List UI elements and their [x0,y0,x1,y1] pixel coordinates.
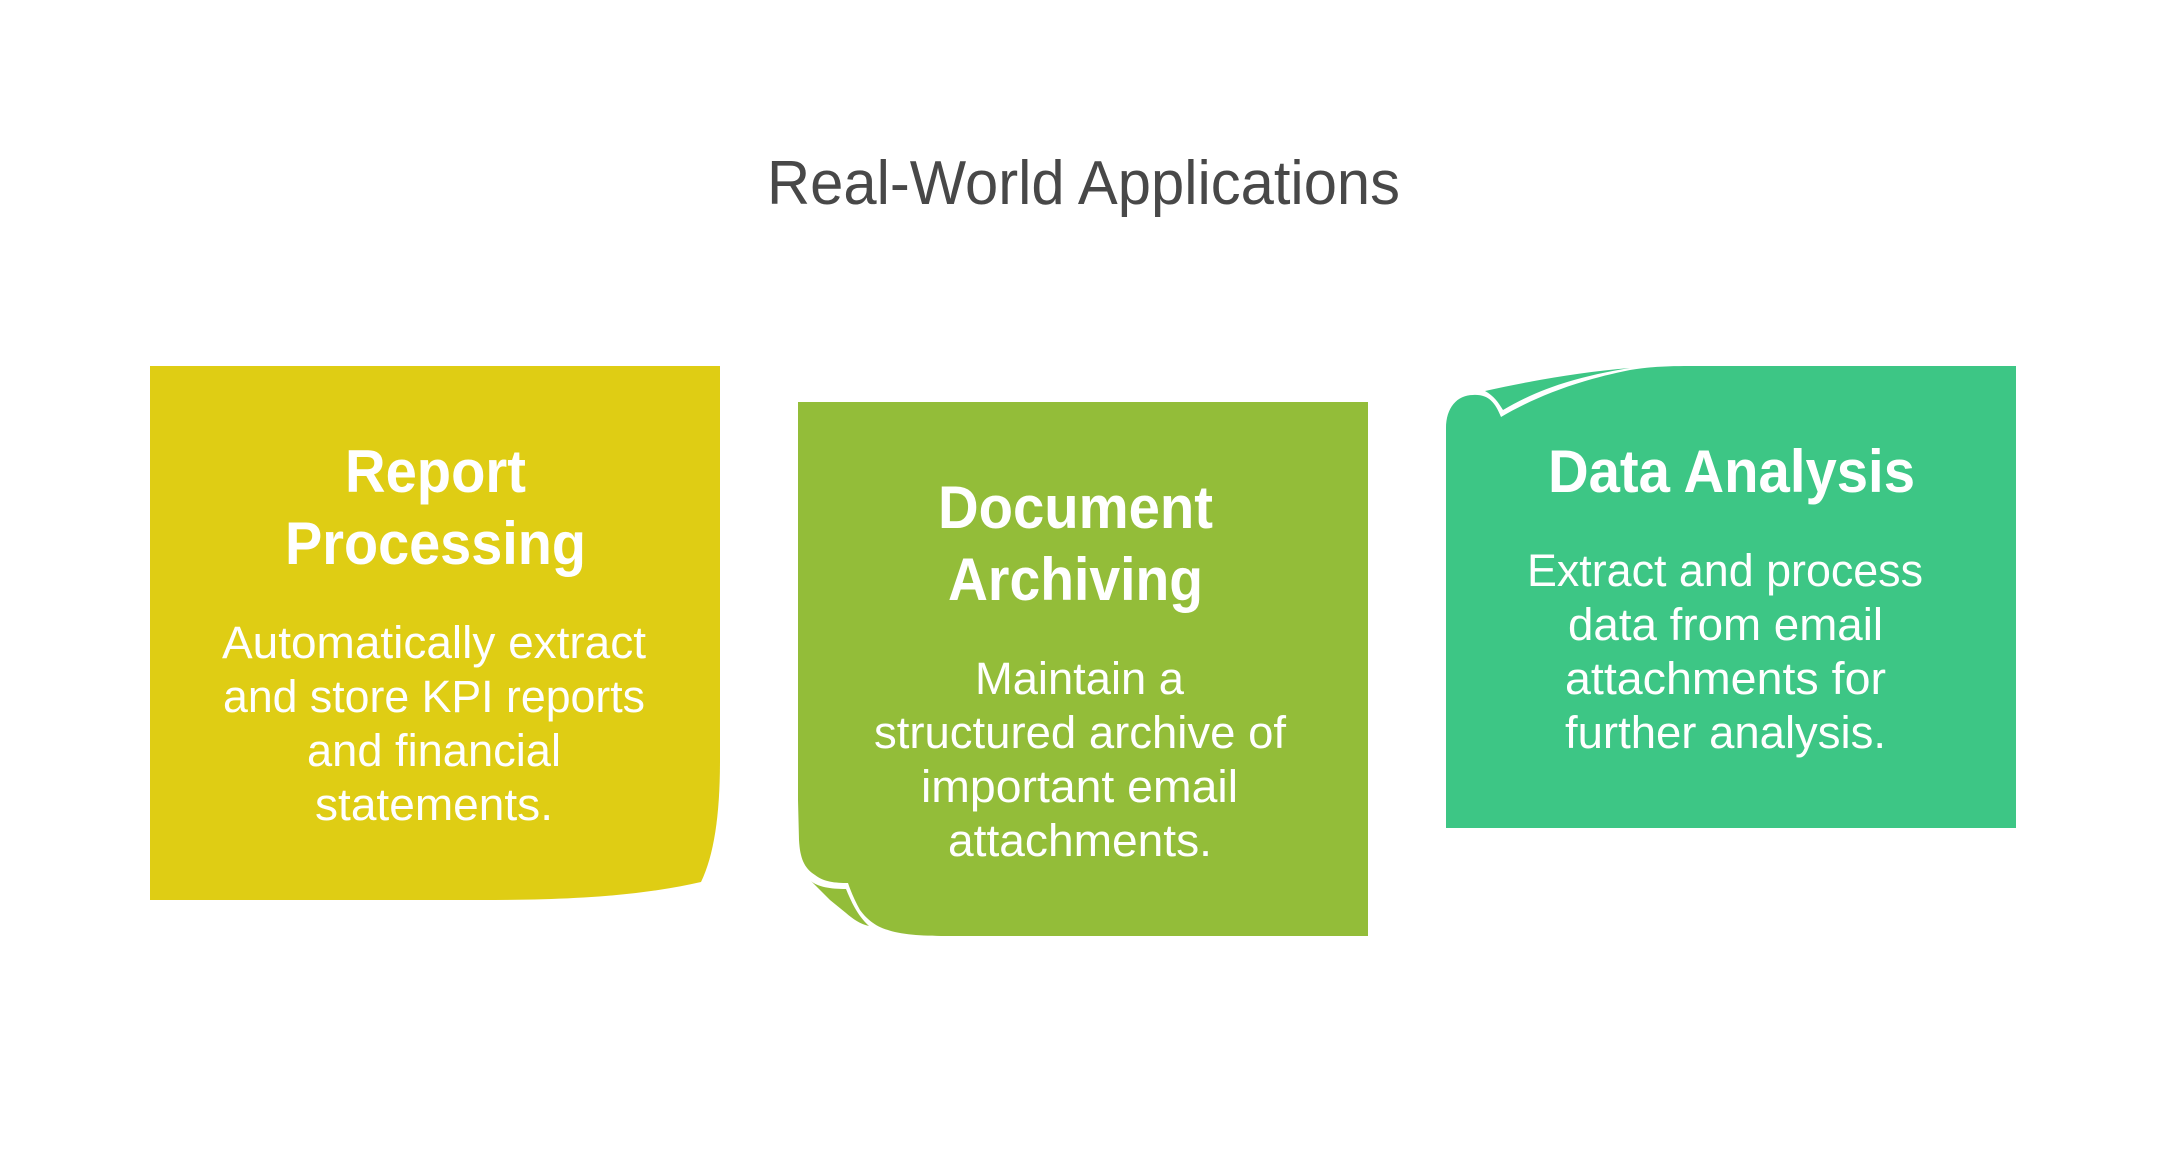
body text: Report Processing: Automatically extract [222,617,647,668]
body text: Report Processing: and financial [307,725,561,776]
card shape with curled corner [798,402,1368,936]
body text: Report Processing [222,617,647,830]
heading: Report Processing: Processing [285,510,586,577]
curled flap [811,881,869,926]
body text: Document Archiving: important email [921,761,1238,812]
body text: Data Analysis: data from email [1568,599,1883,650]
body text: Data Analysis [1527,545,1923,758]
heading: Data Analysis: Data Analysis [1548,438,1915,505]
heading: Document Archiving: Archiving [948,546,1203,613]
panel: Document Archiving [798,402,1368,936]
panel: Report Processing [150,366,720,900]
heading: Report Processing: Report [345,438,526,505]
body text: Document Archiving: structured archive of [874,707,1286,758]
body text: Document Archiving: Maintain a [975,653,1185,704]
body text: Document Archiving: attachments. [948,815,1212,866]
body text: Document Archiving [874,653,1286,866]
body text: Data Analysis: further analysis. [1565,707,1886,758]
card shape with folded corner [150,366,720,900]
panel: Data Analysis [1446,366,2016,828]
card shape with curled corner [1446,366,2016,828]
body text: Data Analysis: attachments for [1565,653,1886,704]
heading: Report Processing [285,438,586,577]
curled flap [1485,368,1630,410]
heading: Document Archiving: Document [938,474,1213,541]
title: Real-World Applications [767,149,1400,218]
body text: Report Processing: statements. [315,779,553,830]
body text: Report Processing: and store KPI reports [223,671,645,722]
body text: Data Analysis: Extract and process [1527,545,1923,596]
heading: Document Archiving [938,474,1213,613]
